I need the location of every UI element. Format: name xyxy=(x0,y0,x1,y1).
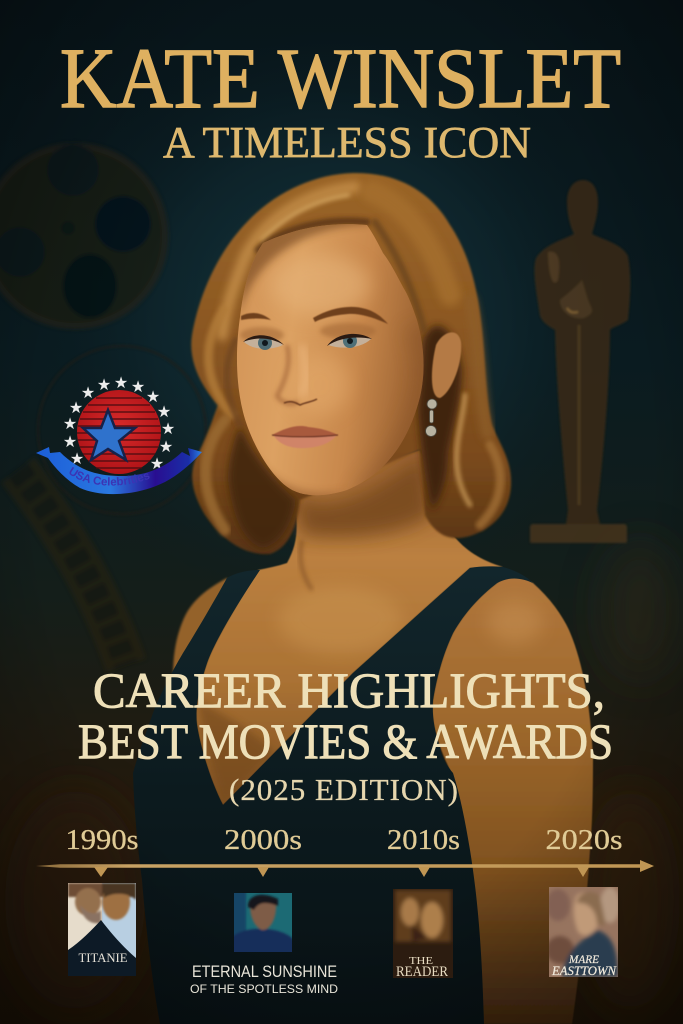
poster: Mare of Easttown: MARE xyxy=(568,952,600,966)
poster: Mare of Easttown xyxy=(546,887,620,978)
poster: The Reader: READER xyxy=(396,964,448,980)
portrait xyxy=(133,173,593,1024)
timeline markers xyxy=(94,867,589,877)
white stars ring xyxy=(63,373,175,473)
white stars ring: ★ xyxy=(69,398,83,417)
white stars ring: ★ xyxy=(63,432,77,451)
logo: USA Celebrities badge xyxy=(36,373,202,494)
poster: The Reader xyxy=(393,889,453,980)
cleavage shading xyxy=(197,700,275,805)
decade labels xyxy=(66,824,622,856)
poster: Titanic xyxy=(68,883,136,976)
red striped disc xyxy=(77,390,161,474)
heading: career highlights: CAREER HIGHLIGHTS, xyxy=(93,662,605,718)
white stars ring: ★ xyxy=(157,402,171,421)
right eye xyxy=(327,334,372,348)
ear xyxy=(432,332,461,398)
icon: golden statuette xyxy=(530,180,630,543)
white stars ring: ★ xyxy=(70,449,84,468)
white stars ring: ★ xyxy=(63,414,77,433)
neck shadow xyxy=(290,455,432,537)
caption: Eternal Sunshine: OF THE SPOTLESS MIND xyxy=(190,982,338,996)
poster: Titanic: TITANIE xyxy=(78,950,128,965)
dress xyxy=(133,566,533,1024)
icon: film reel, top left xyxy=(0,144,165,326)
collarbone notch xyxy=(300,540,312,590)
white stars ring: ★ xyxy=(81,383,95,402)
poster: The Reader: THE xyxy=(409,955,433,967)
icon: second film reel behind logo xyxy=(38,346,206,514)
heading: career highlights xyxy=(78,662,613,769)
neck and chest xyxy=(196,450,503,805)
left shoulder xyxy=(173,578,235,690)
white stars ring: ★ xyxy=(161,419,175,438)
decade labels: 2010s xyxy=(387,824,460,856)
chest highlight xyxy=(278,586,402,654)
eye sockets xyxy=(240,323,376,343)
earring xyxy=(426,399,437,436)
edition line: (2025 EDITION) xyxy=(229,772,458,807)
ribbon banner xyxy=(36,447,202,494)
shoulder highlight xyxy=(487,600,543,644)
poster: Eternal Sunshine xyxy=(234,893,292,952)
white stars ring: ★ xyxy=(131,377,145,396)
mouth xyxy=(272,426,338,448)
heading: career highlights: BEST MOVIES & AWARDS xyxy=(78,713,613,769)
timeline xyxy=(36,824,654,877)
nose xyxy=(277,345,317,405)
caption: Eternal Sunshine xyxy=(190,963,338,996)
hair shadow, right xyxy=(418,326,462,510)
hair back xyxy=(191,173,511,554)
right arm and shoulder xyxy=(432,578,593,1024)
hair strands xyxy=(205,187,500,530)
ribbon banner: USA Celebrities xyxy=(70,467,150,486)
eyebrows xyxy=(241,307,388,324)
icon: film strip xyxy=(18,470,126,665)
subtitle: A TIMELESS ICON xyxy=(163,118,531,167)
white stars ring: ★ xyxy=(146,387,160,406)
timeline arrow xyxy=(36,860,654,872)
white stars ring: ★ xyxy=(97,375,111,394)
left eye xyxy=(243,335,284,350)
decade labels: 2000s xyxy=(224,824,302,856)
caption: Eternal Sunshine: ETERNAL SUNSHINE xyxy=(192,963,337,981)
poster: Mare of Easttown: EASTTOWN xyxy=(551,963,617,978)
white stars ring: ★ xyxy=(159,437,173,456)
white stars ring: ★ xyxy=(114,373,128,392)
title: KATE WINSLET xyxy=(60,30,621,126)
hair shadow, lower left xyxy=(228,425,296,548)
blue star xyxy=(83,410,135,460)
decade labels: 2020s xyxy=(546,824,622,856)
white stars ring: ★ xyxy=(150,454,164,473)
face xyxy=(237,224,424,496)
decade labels: 1990s xyxy=(66,824,138,856)
